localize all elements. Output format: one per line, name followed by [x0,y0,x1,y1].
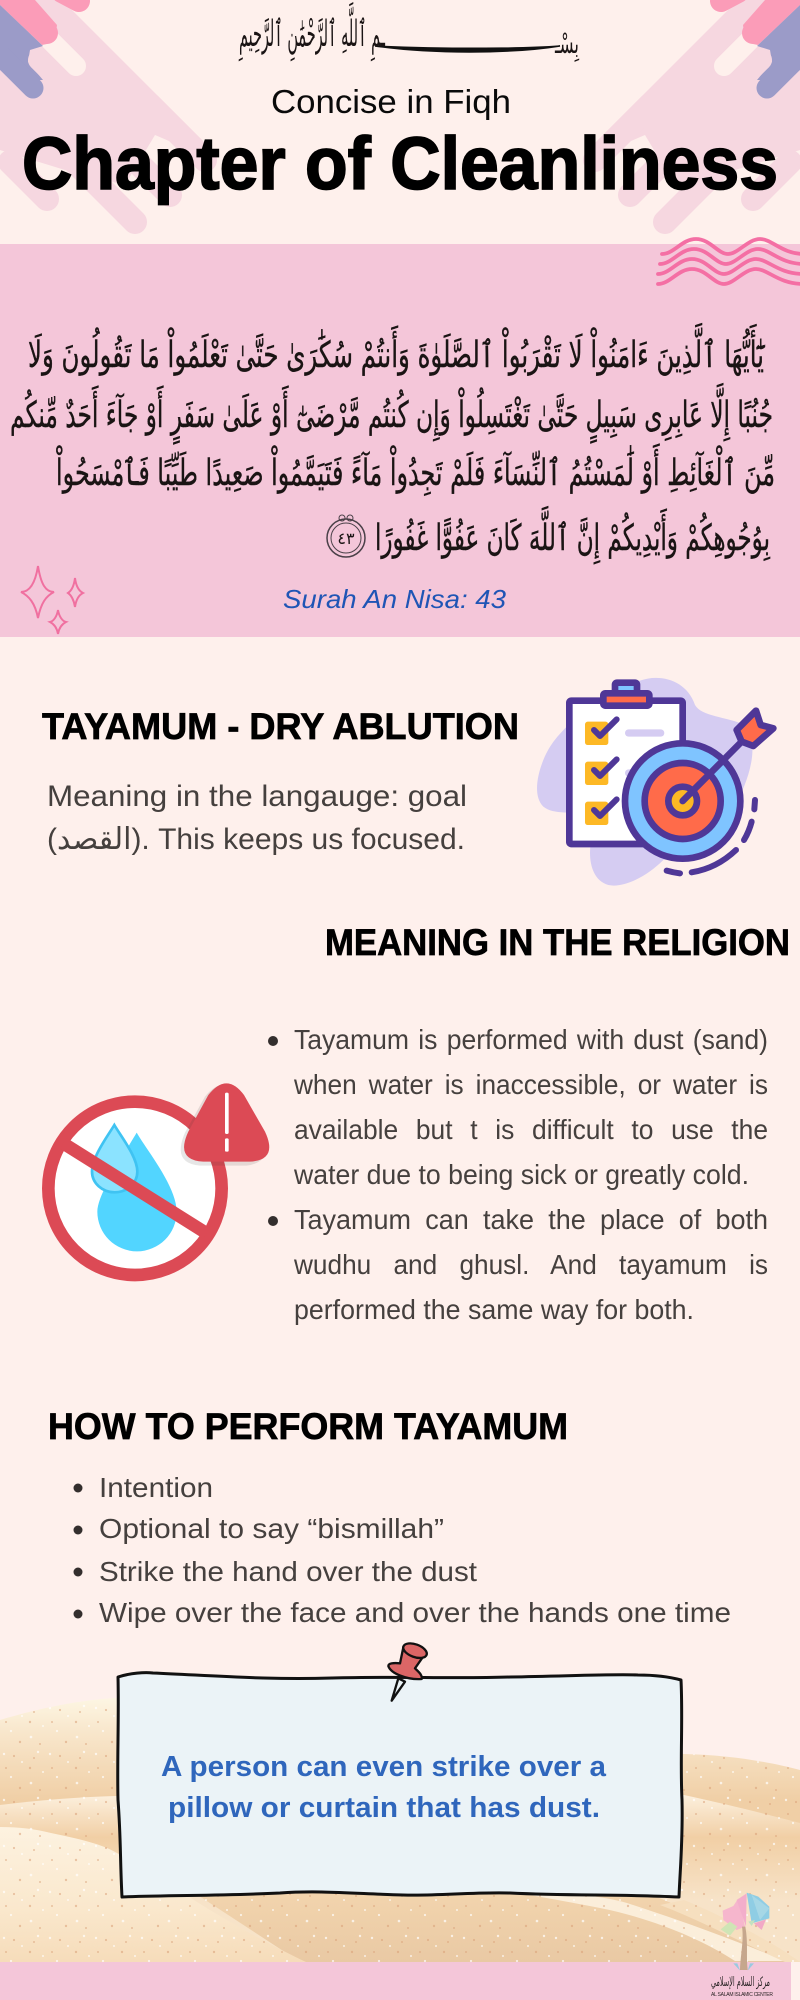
callout text: A person can even strike over a [161,1751,607,1783]
decoration: waves [658,239,800,284]
text block: meaning in the language [47,780,467,856]
callout: note card [118,1673,682,1897]
verse end marker [327,515,365,557]
decoration: sparkles [21,566,83,634]
verse end marker: ٤٣ [337,529,355,548]
bullet one: available but t is difficult to use the [294,1114,768,1145]
list: tayamum steps: Optional to say “bismillah” [99,1513,444,1544]
bullet one: water due to being sick or greatly cold. [293,1159,749,1190]
subtitle: Concise in Fiqh [271,83,511,120]
background: sand dunes [0,1698,800,1962]
bismillah calligraphy: بِسْـ [554,27,579,62]
icon: push pin [388,1640,429,1701]
title: Chapter of Cleanliness [22,122,778,205]
text block: meaning in the language: Meaning in the langauge: goal [47,780,467,813]
text block: meaning in the language: (القصد). This keeps us focused. [47,823,465,856]
callout text [161,1751,607,1824]
panel: footer band [0,1962,791,2000]
heading: Tayamum dry ablution: TAYAMUM - DRY ABLUTION [42,706,519,747]
list: tayamum steps: Strike the hand over the dust [99,1556,477,1587]
heading: how to perform tayamum: HOW TO PERFORM TAYAMUM [48,1406,568,1447]
bullet one [268,1024,768,1190]
icon: clipboard and target [537,678,773,886]
reference: Surah An Nisa: Surah An Nisa: 43 [283,584,507,614]
callout text: pillow or curtain that has dust. [168,1792,600,1824]
list: tayamum steps [74,1472,731,1628]
text block: meaning bullets [268,1024,768,1325]
bullet two: wudhu and ghusl. And tayamum is [293,1249,768,1280]
logo English name: AL SALAM ISLAMIC CENTER [711,1992,773,1998]
list: tayamum steps: Intention [99,1472,213,1503]
decorative corner shapes: top right [595,0,800,222]
bullet one: when water is inaccessible, or water is [293,1069,768,1100]
bullet two [268,1204,768,1325]
icon: no water warning [48,1083,269,1275]
decorative corner shapes: top left [0,0,205,222]
bismillah calligraphy: ـمِ ٱللَّهِ ٱلرَّحْمَٰنِ ٱلرَّحِيمِ [238,1,385,62]
logo tree [721,1893,769,1971]
panel: Quran verse [0,239,800,637]
list: tayamum steps: Wipe over the face and over the hands one time [99,1597,731,1628]
bullet two: Tayamum can take the place of both [294,1204,768,1235]
bullet two: performed the same way for both. [294,1294,694,1325]
bullet one: Tayamum is performed with dust (sand) [294,1024,768,1055]
bismillah calligraphy [238,1,579,62]
logo: Al Salam Islamic Center [711,1893,773,1998]
